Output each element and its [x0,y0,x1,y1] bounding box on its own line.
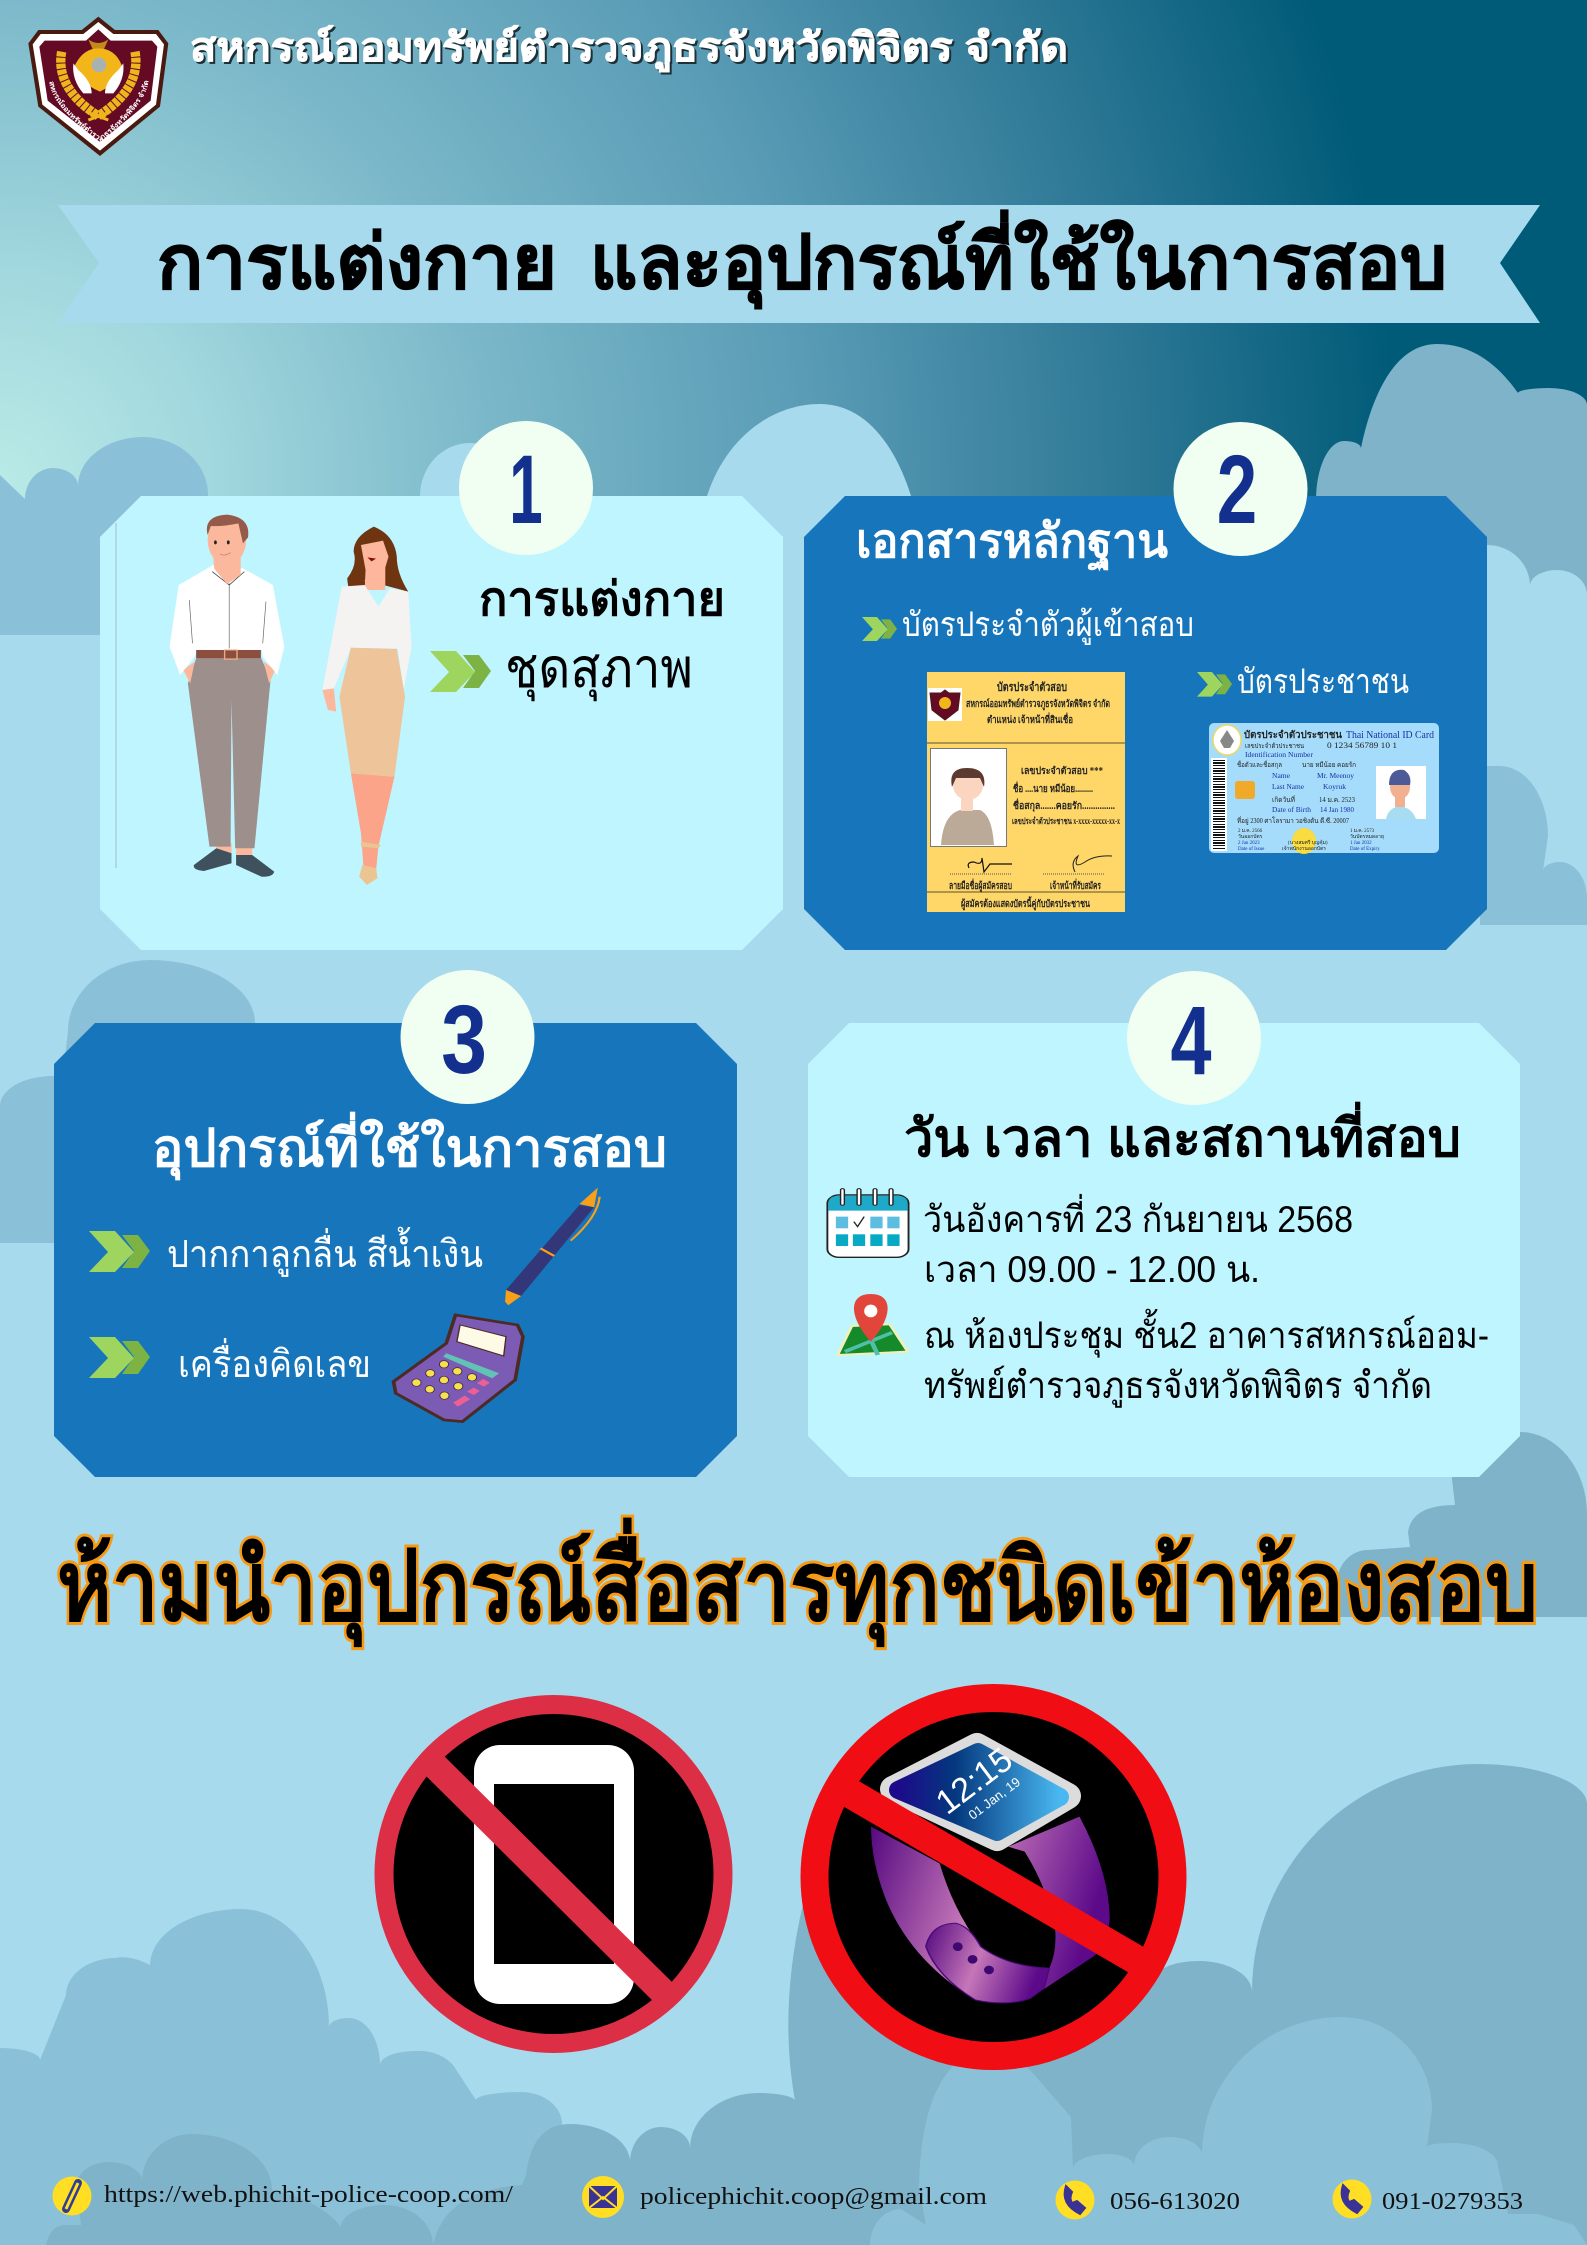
icon: link [52,2176,92,2216]
icon: telephone [1056,2180,1094,2220]
panel 1: dress code [100,421,783,950]
national ID card: ที่อยู่ 2300 ศาโลรามา วอชิงตัน ดี.ซี. 20007 [1237,816,1349,825]
yellow exam card: ผู้สมัครต้องแสดงบัตรนี้คู่กับบัตรประชาชน [961,896,1090,911]
national ID card: 14 ม.ค. 2523 [1319,796,1355,804]
national ID card: เจ้าพนักงานออกบัตร [1282,845,1326,852]
icon: green chevron [862,617,897,641]
national ID card: วันบัตรหมดอายุ [1350,834,1384,840]
prohibition sign: smartwatch [800,1684,1186,2070]
national ID card: เลขประจำตัวประชาชน [1245,742,1304,750]
national ID card: วันออกบัตร [1238,834,1263,840]
yellow exam card: เลขประจำตัวประชาชน x-xxxx-xxxxx-xx-x [1012,816,1120,826]
smartwatch face: 12:15 [929,1740,1020,1822]
number badge 4: 4 [1171,987,1212,1095]
footer contacts [52,2176,1523,2220]
panel 2: documents [804,422,1487,950]
yellow exam card: สหกรณ์ออมทรัพย์ตำรวจภูธรจังหวัดพิจิตร จำกัด [966,698,1110,711]
panel 4: date, time and venue [808,971,1520,1477]
yellow exam card: บัตรประจำตัวสอบ [997,680,1067,694]
national ID card: นาย หมีน้อย คอยรัก [1302,761,1356,769]
panel 3: exam equipment [54,970,737,1477]
icon: blue ballpoint pen [505,1188,600,1305]
phone number 1: 056-613020 [1110,2189,1240,2215]
icon: green chevron [1197,672,1232,697]
panel 1 heading: การแต่งกาย [479,572,725,625]
national ID card: Date of Birth [1272,806,1312,814]
number badge 3: 3 [441,987,487,1095]
number badge 1: 1 [509,436,543,545]
national ID card: บัตรประจำตัวประชาชน [1244,729,1342,741]
figure: woman in blouse and skirt [322,527,411,885]
yellow exam card: เลขประจำตัวสอบ *** [1021,765,1103,777]
national ID card: 2 Jan 2023 [1238,841,1260,846]
yellow exam card: เจ้าหน้าที่รับสมัคร [1050,878,1101,892]
national ID card: 14 Jan 1980 [1320,806,1354,814]
smartwatch face [893,1740,1068,1838]
yellow exam card: ลายมือชื่อผู้สมัครสอบ [949,878,1012,893]
yellow exam card: ชื่อ ....นาย หมีน้อย......... [1013,781,1093,795]
icon: mail [582,2176,624,2218]
icon: green chevron [89,1231,150,1272]
national ID card: Thai National ID Card [1346,729,1434,741]
exam card label: บัตรประจำตัวผู้เข้าสอบ [902,606,1194,645]
prohibition sign: mobile phone [374,1695,732,2053]
national ID card: Identification Number [1245,751,1314,759]
national ID card: Mr. Meenoy [1317,772,1355,780]
yellow exam card: ชื่อสกุล.......คอยรัก............... [1013,798,1115,812]
panel 1 item: ชุดสุภาพ [505,637,693,702]
website: https://web.phichit-police-coop.com/ [104,2182,513,2208]
panel 4 heading: วัน เวลา และสถานที่สอบ [904,1102,1461,1168]
email: policephichit.coop@gmail.com [640,2184,987,2210]
icon: calendar [827,1189,909,1257]
logo: police cooperative shield: สหกรณ์ออมทรัพย์ตำรวจภูธรจังหวัดพิจิตร จำกัด [49,80,149,142]
logo: police cooperative shield [28,16,168,156]
national ID card: 1 Jan 2032 [1350,841,1372,846]
yellow exam card [927,672,1125,912]
phone number 2: 091-0279353 [1382,2189,1523,2215]
national ID card: Name [1272,772,1290,780]
national ID card: Date of Issue [1238,847,1265,852]
national ID card: 1 ม.ค. 2573 [1350,829,1375,834]
number badge 3 [400,970,534,1104]
national ID card: Last Name [1272,783,1304,791]
figure: man in white shirt [170,515,284,877]
icon: map pin [838,1294,908,1355]
number badge 2 [1174,422,1308,556]
national ID card: 2 ม.ค. 2566 [1238,829,1263,834]
national ID card: Koyruk [1323,783,1347,791]
calculator item text: เครื่องคิดเลข [178,1338,371,1386]
national ID label: บัตรประชาชน [1237,663,1409,701]
national ID card: เกิดวันที่ [1272,795,1295,804]
national ID card [1209,723,1439,854]
icon: green chevron [430,651,491,692]
national ID card: Date of Expiry [1350,847,1380,852]
number badge 1 [459,421,593,555]
panel 3 heading: อุปกรณ์ที่ใช้ในการสอบ [152,1112,667,1181]
yellow exam card: ตำแหน่ง เจ้าหน้าที่สินเชื่อ [987,712,1073,726]
title ribbon: การแต่งกาย [157,220,557,304]
number badge 2: 2 [1217,436,1257,544]
date line: วันอังคารที่ 23 กันยายน 2568 [923,1193,1353,1240]
icon: telephone [1332,2180,1372,2218]
icon: purple calculator [394,1315,523,1422]
panel 2 heading: เอกสารหลักฐาน [856,514,1168,572]
title ribbon [58,205,1540,323]
venue line 1: ณ ห้องประชุม ชั้น2 อาคารสหกรณ์ออม- [924,1308,1489,1358]
header organisation name: สหกรณ์ออมทรัพย์ตำรวจภูธรจังหวัดพิจิตร จำกัด [190,25,1068,72]
title ribbon: และอุปกรณ์ที่ใช้ในการสอบ [590,209,1447,309]
national ID card: ชื่อตัวและชื่อสกุล [1237,760,1282,769]
national ID card: 0 1234 56789 10 1 [1327,741,1397,750]
number badge 4 [1127,971,1261,1105]
smartwatch strap [871,1817,1110,2003]
pen item text: ปากกาลูกลื่น สีน้ำเงิน [167,1226,483,1277]
national ID card: (นางสมศรี บุญคุ้ม) [1288,839,1328,846]
venue line 2: ทรัพย์ตำรวจภูธรจังหวัดพิจิตร จำกัด [924,1365,1432,1408]
smartwatch face: 01 Jan, 19 [966,1774,1023,1823]
icon: green chevron [89,1337,150,1378]
time line: เวลา 09.00 - 12.00 น. [924,1249,1260,1290]
